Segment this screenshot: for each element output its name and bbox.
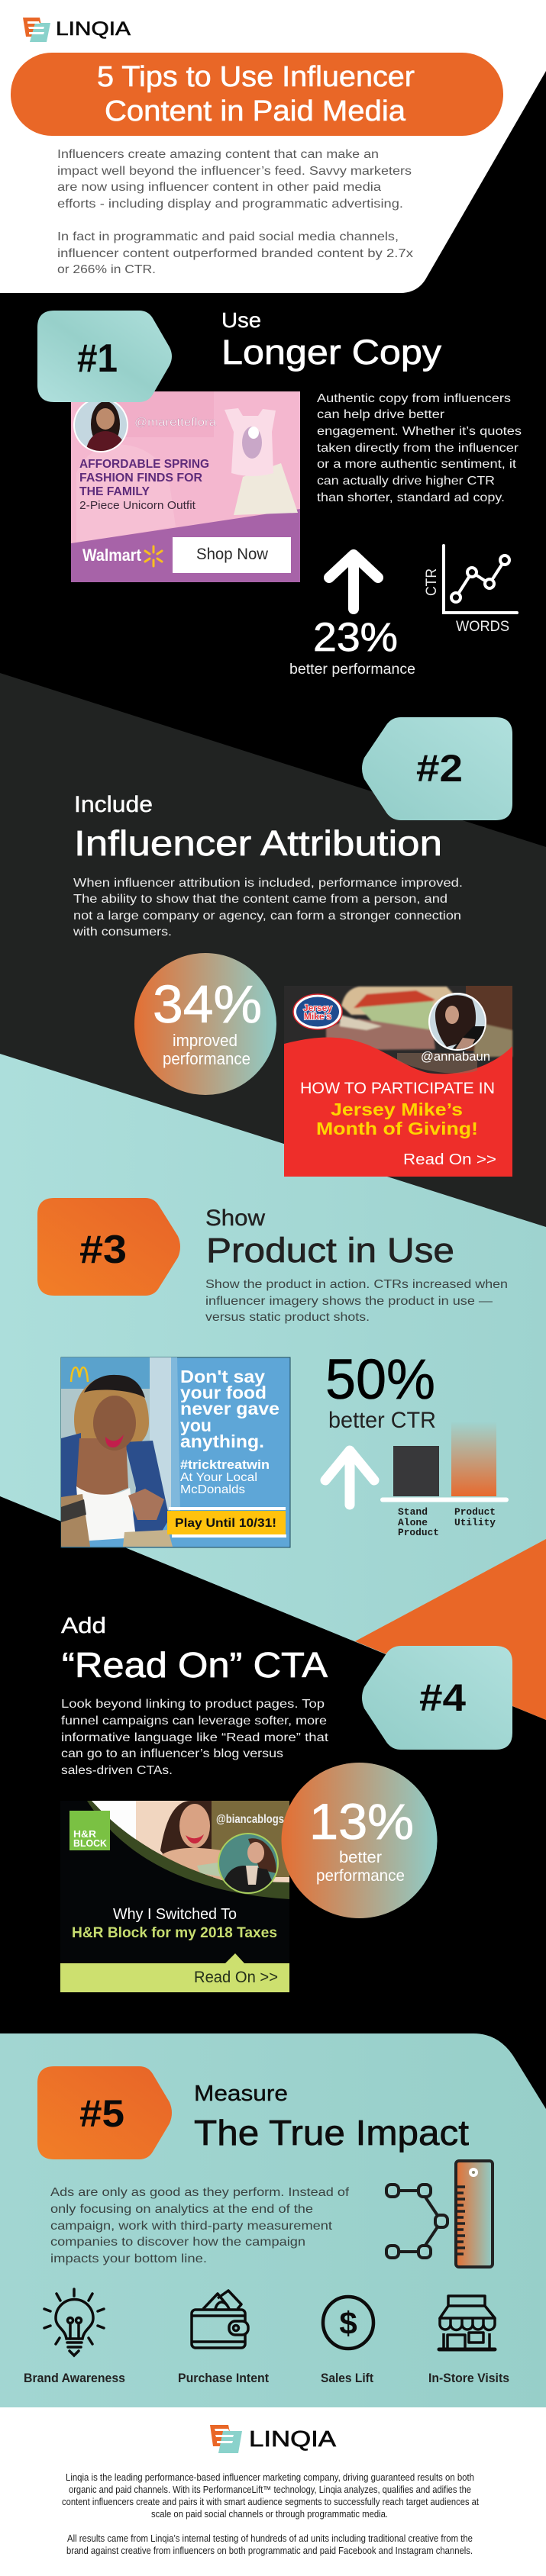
ad: McDonald's: At Your Local <box>180 1471 257 1484</box>
footer <box>62 2425 479 2556</box>
badge #2: #2 <box>416 747 463 790</box>
icon: light bulb <box>44 2289 104 2355</box>
ad: Jersey Mike's: HOW TO PARTICIPATE IN <box>300 1080 495 1097</box>
body text: influencer imagery shows the product in use — <box>205 1295 493 1308</box>
body text: taken directly from the influencer <box>317 442 519 455</box>
stat circle: 13%: 13% <box>309 1793 414 1850</box>
metric: in-store visits: In-Store Visits <box>428 2371 509 2385</box>
body text: or a more authentic sentiment, it <box>317 458 517 471</box>
icon: store <box>439 2296 495 2349</box>
title banner: Content in Paid Media <box>105 95 406 127</box>
badge #4: #4 <box>419 1676 466 1719</box>
intro text: are now using influencer content in other paid media <box>57 181 381 194</box>
badge #1: #1 <box>77 336 118 381</box>
body text: informative language like “Read more” that <box>61 1731 329 1744</box>
stat: 50%: 50% <box>325 1348 435 1411</box>
bar chart: Stand <box>398 1506 428 1518</box>
intro text: or 266% in CTR. <box>57 263 156 276</box>
ad: McDonald's: never gave <box>180 1399 279 1418</box>
heading: Longer Copy <box>221 333 442 372</box>
ad: Walmart unicorn outfit <box>71 391 300 582</box>
body text: versus static product shots. <box>205 1311 370 1324</box>
body text: not a large company or agency, can form a stronger connection <box>73 910 461 923</box>
logo: golden arches <box>71 1367 88 1382</box>
ad: Walmart unicorn outfit: AFFORDABLE SPRING <box>79 458 209 471</box>
intro text <box>57 148 413 276</box>
stat circle: 34%: performance <box>163 1049 250 1068</box>
title banner: 5 Tips to Use Influencer <box>97 61 415 93</box>
about text: content influencers create and pairs it with smart audience segments to successfully reach target audiences at <box>62 2497 479 2507</box>
ad: H&R Block: H&R Block for my 2018 Taxes <box>72 1925 277 1941</box>
heading <box>74 792 442 863</box>
heading: Add <box>61 1614 106 1638</box>
heading: Measure <box>194 2082 288 2106</box>
ad: Jersey Mike's: @annabaun <box>421 1049 490 1064</box>
badge #1 <box>37 311 172 402</box>
stat circle: 13% <box>281 1763 437 1918</box>
stat circle: 13%: better <box>339 1849 382 1866</box>
about text: All results came from Linqia’s internal testing of hundreds of ad units including traditional creative from the <box>67 2533 473 2544</box>
body text: only focusing on analytics at the end of the <box>50 2203 313 2216</box>
bar chart: Product <box>398 1527 439 1538</box>
heading: Influencer Attribution <box>74 823 442 863</box>
body text: Authentic copy from influencers <box>317 392 511 405</box>
photo: influencer <box>92 1801 289 1885</box>
ad: McDonald's: Play Until 10/31! <box>175 1517 276 1530</box>
badge #4 <box>362 1646 512 1750</box>
heading: The True Impact <box>194 2113 469 2153</box>
body text: funnel campaigns can leverage softer, more <box>61 1715 327 1728</box>
metric: sales lift <box>321 2297 373 2385</box>
ad: Jersey Mike's <box>284 986 512 1177</box>
arrow up <box>325 1451 374 1505</box>
ad: Walmart unicorn outfit: Shop Now <box>196 546 269 563</box>
badge #2 <box>362 717 512 820</box>
logo: Jersey Mike's: Jersey <box>303 1003 332 1013</box>
metric: brand awareness <box>24 2289 125 2385</box>
ad: McDonald's: your food <box>180 1383 267 1402</box>
body text: Look beyond linking to product pages. Top <box>61 1698 325 1711</box>
body text: companies to discover how the campaign <box>50 2236 305 2249</box>
avatar <box>428 993 489 1051</box>
ad: McDonald's: anything. <box>180 1431 264 1451</box>
heading <box>221 308 442 372</box>
logo: Linqia footer <box>210 2425 337 2453</box>
heading: Include <box>74 792 153 817</box>
stat: 50%: better CTR <box>328 1408 436 1433</box>
icon: ruler and network <box>386 2161 493 2267</box>
badge #5: #5 <box>79 2092 124 2135</box>
avatar <box>218 1833 279 1894</box>
icon: dollar coin: $ <box>339 2305 357 2341</box>
body text <box>50 2186 350 2265</box>
about text: Linqia is the leading performance-based influencer marketing company, driving guaranteed results on both <box>66 2472 474 2483</box>
heading: “Read On” CTA <box>62 1645 328 1685</box>
logo: H&R Block: H&R <box>73 1828 97 1840</box>
chart: CTR vs words: WORDS <box>456 619 509 635</box>
bar chart: Utility <box>454 1517 496 1528</box>
ad: Walmart unicorn outfit: FASHION FINDS FOR <box>79 472 202 485</box>
about text: scale on paid social channels or through programmatic media. <box>151 2509 388 2520</box>
panel: tip 1 longer copy <box>37 308 522 678</box>
body text: can help drive better <box>317 408 445 421</box>
metric: brand awareness: Brand Awareness <box>24 2371 125 2385</box>
stat: 23%: better performance <box>289 662 415 678</box>
body text: When influencer attribution is included, performance improved. <box>73 877 463 890</box>
panel: tip 5 true impact <box>24 2066 509 2385</box>
metric: purchase intent: Purchase Intent <box>178 2371 269 2385</box>
ad: H&R Block: @biancablogs <box>216 1813 284 1826</box>
ad: McDonald's: McDonalds <box>180 1483 245 1496</box>
metric: in-store visits <box>428 2296 509 2385</box>
stat circle: 13%: performance <box>316 1867 405 1885</box>
intro text: efforts - including display and programmatic advertising. <box>57 198 403 211</box>
heading <box>194 2082 469 2153</box>
heading: Show <box>205 1206 265 1231</box>
product: skirt <box>234 463 298 515</box>
ad: Jersey Mike's: Month of Giving! <box>316 1119 478 1138</box>
metric: sales lift: Sales Lift <box>321 2371 373 2385</box>
avatar <box>73 402 128 452</box>
logo: Linqia header: LINQIA <box>56 18 131 40</box>
ad: McDonald's <box>61 1357 290 1547</box>
badge #3: #3 <box>79 1228 127 1272</box>
badge #3 <box>37 1198 180 1296</box>
body text: campaign, work with third-party measurement <box>50 2220 333 2233</box>
body text <box>205 1278 508 1324</box>
intro text: Influencers create amazing content that can make an <box>57 148 379 161</box>
ad: H&R Block: Why I Switched To <box>113 1906 237 1923</box>
stat circle: 34%: 34% <box>153 974 262 1034</box>
ad: McDonald's: you <box>180 1415 212 1435</box>
body text: with consumers. <box>73 926 172 939</box>
bar chart: Product <box>454 1506 496 1518</box>
body text: than shorter, standard ad copy. <box>317 491 505 504</box>
ad: H&R Block: Read On >> <box>194 1969 278 1986</box>
logo: Jersey Mike's: Mike's <box>304 1011 331 1022</box>
body text: can actually drive higher CTR <box>317 475 495 488</box>
body text <box>73 877 463 939</box>
arrow up <box>329 555 378 609</box>
ad: Jersey Mike's: Read On >> <box>403 1151 496 1168</box>
logo: Jersey Mike's <box>293 994 342 1029</box>
body text: The ability to show that the content came from a person, and <box>73 893 447 906</box>
body text: engagement. Whether it’s quotes <box>317 425 522 438</box>
body text: Show the product in action. CTRs increased when <box>205 1278 508 1291</box>
panel: tip 4 read on CTA <box>60 1614 512 1992</box>
photo: influencer eating <box>61 1357 180 1547</box>
panel: tip 3 product in use <box>37 1198 509 1547</box>
logo: Linqia header <box>23 18 131 42</box>
product: shirt <box>225 408 276 476</box>
icon: walmart spark <box>145 546 162 566</box>
badge #5 <box>37 2066 172 2159</box>
icon: wallet <box>192 2291 248 2348</box>
body text: impacts your bottom line. <box>50 2252 207 2265</box>
logo: H&R Block: BLOCK <box>73 1837 108 1849</box>
stat circle: 34% <box>134 953 276 1095</box>
intro text: In fact in programmatic and paid social media channels, <box>57 230 399 243</box>
bar chart <box>380 1422 509 1538</box>
about text <box>62 2472 479 2556</box>
heading: Product in Use <box>206 1231 454 1270</box>
stat circle: 34%: improved <box>173 1031 237 1050</box>
ad: Walmart unicorn outfit: 2-Piece Unicorn Outfit <box>79 499 196 512</box>
body text <box>317 392 522 504</box>
ad: McDonald's: Don't say <box>180 1367 265 1386</box>
ad: Walmart unicorn outfit: Walmart <box>82 546 142 565</box>
intro text: influencer content outperformed branded content by 2.7x <box>57 247 413 260</box>
body text: Ads are only as good as they perform. Instead of <box>50 2186 350 2199</box>
body text: can go to an influencer’s blog versus <box>61 1747 283 1760</box>
body text <box>61 1698 329 1777</box>
about text: organic and paid channels. With its PerformanceLift™ technology, Linqia analyzes, qualifies and adifies the <box>69 2484 471 2495</box>
heading: Use <box>221 308 261 332</box>
body text: sales-driven CTAs. <box>61 1764 173 1777</box>
intro text: impact well beyond the influencer’s feed. Savvy marketers <box>57 165 412 178</box>
logo: Linqia footer: LINQIA <box>249 2427 337 2452</box>
stat: 23%: 23% <box>313 615 398 660</box>
stat: 23% <box>289 615 415 678</box>
ad: Jersey Mike's: Jersey Mike’s <box>331 1100 463 1119</box>
ad: Walmart unicorn outfit: THE FAMILY <box>79 485 150 498</box>
panel: tip 2 influencer attribution <box>73 717 512 1177</box>
photo: sandwich <box>326 987 512 1057</box>
about text: brand against creative from influencers on both programmatic and paid Facebook and Instagram channels. <box>66 2545 473 2556</box>
ad: H&R Block <box>60 1801 289 1992</box>
metric: purchase intent <box>178 2291 269 2385</box>
heading <box>61 1614 328 1685</box>
ad: Walmart unicorn outfit: @maretteflora <box>134 416 217 429</box>
title banner <box>11 53 503 136</box>
chart: CTR vs words: CTR <box>424 568 440 596</box>
logo: H&R Block <box>69 1811 110 1850</box>
chart: CTR vs words <box>424 546 517 635</box>
heading <box>205 1206 454 1270</box>
ad: McDonald's: #tricktreatwin <box>180 1457 270 1472</box>
bar chart: Alone <box>398 1517 428 1528</box>
